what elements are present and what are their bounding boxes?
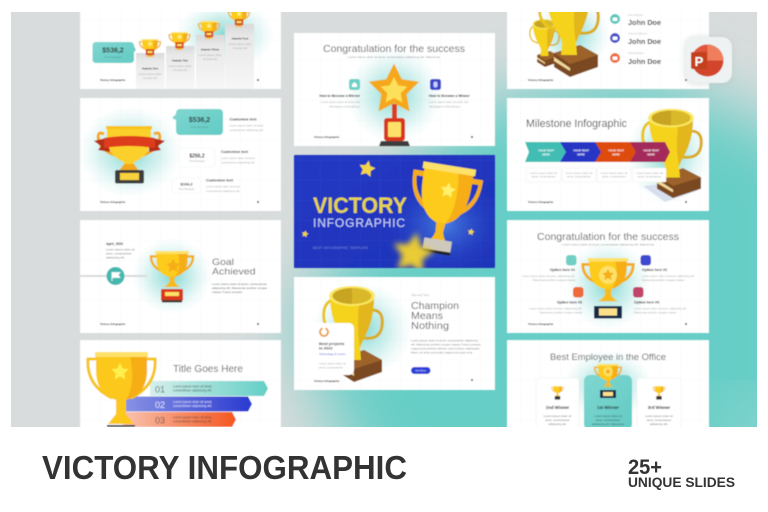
white footer area (0, 427, 768, 512)
left text (319, 94, 361, 108)
banner 01: consectetuer adipiscing elit. (173, 388, 212, 392)
banner 02: consectetuer adipiscing elit. (173, 404, 212, 408)
laurel icon (320, 326, 328, 336)
date note (106, 242, 135, 260)
slide count: 25+ (628, 456, 662, 479)
price bubble (92, 42, 136, 63)
right text (429, 94, 470, 108)
chevron arrows (525, 142, 670, 162)
project card: Best projects (319, 341, 345, 346)
white reward bubble 2: $256,2 (189, 154, 205, 160)
option 3 (529, 300, 582, 314)
subtitle: Lorem ipsum dolor sit amet, consectetuer adipiscing elit. Maecenas (348, 55, 440, 59)
date note: adipiscing elit. (106, 256, 125, 260)
slides artwork (78, 0, 732, 430)
footer: Victory Infographic (528, 322, 554, 326)
option 1: Lorem ipsum dolor sit amet, adipiscing elit. (522, 274, 575, 278)
card: 3rd winner: 3rd Winner (648, 405, 671, 410)
slide: goal achieved (80, 220, 281, 333)
white reward bubble 3: First Rewards (179, 188, 195, 191)
reward text 1: consectetuer adipiscing elit (230, 128, 263, 132)
price bubble: $536,2 (102, 48, 124, 54)
option 1: Option here #1 (550, 268, 575, 272)
banner 03 (123, 412, 236, 427)
teal reward bubble: First Rewards (191, 125, 209, 129)
card: 3rd winner: adipiscing elit. (650, 422, 668, 426)
note cards: amet, consectetuer (532, 174, 555, 178)
slide: rewards with ribbon trophy (78, 98, 281, 211)
note cards: amet, consectetuer (567, 174, 591, 178)
slide: title with numbered banners (80, 340, 281, 430)
option 2 (642, 268, 695, 282)
small trophies on columns (140, 9, 250, 57)
winner three: John Doe (628, 57, 661, 66)
body text: adipiscing elit. Maecenas porttitor congue (212, 286, 268, 290)
white reward bubble 2 (176, 148, 215, 167)
banner 02: Lorem ipsum dolor sit amet, (173, 400, 212, 404)
card: 2nd winner: adipiscing elit. (548, 422, 567, 426)
card: 2nd winner: Lorem ipsum dolor sit (544, 414, 572, 418)
note cards: Lorem ipsum dolor sit (636, 171, 663, 175)
banner 03: consectetuer adipiscing elit. (173, 420, 212, 424)
slide: congratulation options (507, 220, 709, 333)
reward text 3 (206, 178, 240, 193)
reward text 2: Lorem ipsum dolor sit amet (221, 156, 255, 160)
star left (301, 230, 309, 238)
ribbon trophy (94, 126, 165, 184)
chevron arrows: HERE (542, 152, 550, 156)
footer: Victory Infographic (528, 78, 554, 82)
button: Get More (415, 368, 427, 372)
banner 03: 03 (155, 416, 165, 426)
slide count label: UNIQUE SLIDES (628, 475, 735, 490)
heading: Best Employee in the Office (550, 352, 666, 362)
heading: Achieved (212, 266, 256, 278)
option 2: Maecenas porttitor congue massa (642, 278, 685, 282)
chevron arrows: YOUR TEXT (573, 148, 589, 152)
slide: congratulation with star (294, 33, 495, 146)
heading: Congratulation for the success (537, 232, 679, 243)
blurred star (390, 230, 437, 269)
chevron arrows: HERE (647, 152, 655, 156)
heading (411, 300, 459, 332)
star top (359, 160, 376, 178)
white mask above band (0, 0, 768, 12)
award columns: sit amet elit (203, 57, 217, 61)
small tagline: BEST INFOGRAPHIC TEMPLATE (313, 246, 368, 250)
timeline with flag icon (80, 267, 147, 285)
card: 2nd winner: amet, consectetuer (545, 418, 570, 422)
slide: blue cover (294, 155, 503, 275)
award columns: sit amet elit (173, 68, 187, 72)
slide: champion means nothing (294, 277, 495, 390)
reward text 1 (230, 118, 263, 132)
reward text 2 (221, 150, 255, 164)
note cards: amet, consectetuer (602, 174, 626, 178)
winner one (610, 13, 661, 27)
right text: Lorem ipsum dolor sit amet, Est (429, 100, 469, 104)
option 4: Option here #4 (634, 300, 659, 304)
icon: PowerPoint badge (685, 37, 732, 84)
banner 01: 01 (155, 384, 165, 394)
card: 2nd winner (536, 378, 579, 430)
banner 01 (150, 381, 268, 396)
winner one: First Winner (628, 13, 643, 17)
left text: How to Become a Winner (319, 94, 361, 98)
card: 1st winner (584, 364, 632, 430)
slide: best employee (507, 340, 709, 430)
icon: teal square (349, 79, 360, 90)
white reward bubble 2: First Rewards (189, 160, 205, 163)
winner two: Second Winner (628, 32, 647, 36)
award columns: sit amet elit (233, 46, 247, 50)
icon: blue square (430, 79, 441, 90)
option 4 (634, 300, 687, 314)
footer: Victory Infographic (100, 200, 126, 204)
option 3: Lorem ipsum dolor sit amet, adipiscing elit. (529, 306, 582, 310)
note cards: amet, consectetuer (638, 174, 661, 178)
project card: in 2022 (319, 346, 333, 350)
chevron arrows: HERE (612, 152, 620, 156)
heading: Champion (411, 300, 459, 312)
option 1 (522, 268, 575, 282)
winner two: John Doe (628, 37, 661, 46)
date note: April, 2020 (106, 242, 123, 246)
white reward bubble 3: $104,2 (180, 182, 193, 186)
banner 02 (125, 396, 252, 412)
note cards (526, 168, 666, 182)
body text: Lorem ipsum dolor sit amet, consectetuer adipiscing (411, 338, 478, 342)
button (411, 367, 430, 374)
tilted trophy (412, 160, 484, 256)
option 2: Lorem ipsum dolor sit amet, adipiscing elit. (642, 274, 695, 278)
body text: massa. Fusce posuere (212, 290, 243, 294)
award columns: Awards Three (201, 48, 220, 52)
trophy (151, 251, 193, 302)
winner one: John Doe (628, 18, 661, 27)
price bubble: First Rewards (104, 55, 122, 59)
option 3: Option here #3 (557, 300, 582, 304)
right text: aliciniagora orthiroall gos (429, 104, 461, 108)
subtitle: Lorem ipsum dolor sit amet, consectetuer adipiscing elit. Maecenas (562, 242, 654, 246)
large trophy (88, 352, 155, 427)
award columns: Lorem ipsum dolor (168, 64, 192, 68)
reward text 1: Customize text (230, 118, 257, 122)
star right (467, 228, 475, 236)
slide: awards staircase (80, 0, 281, 89)
note cards: Lorem ipsum dolor sit (566, 171, 593, 175)
title: Title Goes Here (173, 363, 243, 375)
heading: Milestone Infographic (526, 118, 627, 130)
isometric trophy (643, 109, 701, 202)
heading: Means (411, 310, 443, 322)
banner 03: Lorem ipsum dolor sit amet, (173, 416, 212, 420)
card: 3rd winner: Lorem ipsum dolor sit (645, 414, 673, 418)
body text: magna sed pulvinar ultricies, purus lectus malesuada (411, 346, 479, 350)
award columns: Lorem ipsum dolor (228, 42, 252, 46)
option 1: Maecenas porttitor congue massa (533, 278, 575, 282)
reward text 2: consectetuer adipiscing elit (221, 160, 255, 164)
award columns: Lorem ipsum dolor (138, 72, 162, 76)
card: 1st winner: amet, consectetuer (596, 418, 620, 422)
heading: Goal (212, 257, 234, 268)
reward text 3: consectetuer adipiscing elit (206, 189, 240, 193)
date note: Lorem ipsum dolor sit (106, 248, 135, 252)
footer: Victory Infographic (314, 379, 340, 383)
footer: Victory Infographic (100, 322, 126, 326)
project card: Technology & Lorem (319, 352, 346, 356)
banner 01: Lorem ipsum dolor sit amet, (173, 384, 212, 388)
footer: Victory Infographic (100, 78, 126, 82)
option 4: Lorem ipsum dolor sit amet, adipiscing elit. (634, 306, 687, 310)
award columns: sit amet elit (143, 76, 157, 80)
card: 1st winner: 1st Winner (597, 405, 619, 410)
body text (411, 338, 482, 354)
card: 2nd winner: 2nd Winner (546, 405, 570, 410)
option 4: Maecenas porttitor congue massa (634, 310, 677, 314)
note cards: Lorem ipsum dolor sit (601, 171, 628, 175)
medal trophy (583, 258, 633, 318)
cover title: VICTORY (313, 193, 407, 218)
option 3: Maecenas porttitor congue massa (540, 310, 582, 314)
card: 1st winner: Lorem ipsum dolor sit (594, 414, 622, 418)
note cards: Lorem ipsum dolor sit (530, 171, 557, 175)
slide: milestone infographic (507, 98, 710, 211)
body text: Lorem ipsum dolor sit amet, consectetuer (212, 282, 267, 286)
reward text 1: Lorem ipsum dolor sit amet (230, 124, 263, 128)
body text (212, 282, 268, 294)
cover subtitle: INFOGRAPHIC (313, 216, 405, 230)
star trophy (369, 64, 419, 146)
teal reward bubble (172, 109, 223, 135)
footer: Victory Infographic (528, 200, 554, 204)
award columns: Awards One (142, 66, 159, 70)
chevron arrows: YOUR TEXT (538, 148, 554, 152)
chevron arrows: HERE (577, 152, 585, 156)
teal reward bubble: $536,2 (189, 117, 210, 124)
left text: Lorem ipsum dolor sit amet, Est (321, 100, 360, 104)
slide: winners list (507, 0, 709, 89)
background band (11, 12, 757, 427)
project card (312, 323, 354, 375)
main title: VICTORY INFOGRAPHIC (42, 449, 407, 486)
icon: PowerPoint badge: P (695, 54, 704, 69)
date note: amet, consectetuer (106, 252, 132, 256)
body text: libero, sit amet commodo magna eros quis urna. (411, 350, 473, 354)
tag: Tips and Trick (411, 293, 429, 297)
chevron arrows: YOUR TEXT (608, 148, 624, 152)
banner 02: 02 (155, 400, 165, 410)
reward text 3: Lorem ipsum dolor sit amet (206, 184, 240, 188)
award columns: Awards Two (172, 58, 188, 62)
heading (212, 257, 256, 278)
award columns (136, 24, 254, 89)
winner three: Third Winner (628, 51, 644, 55)
icons (566, 255, 651, 298)
right text: How to Become a Winner (429, 94, 470, 98)
winner three (610, 51, 661, 66)
body text: elit. Maecenas porttitor congue massa. Fusce posuere, (411, 342, 482, 346)
reward text 2: Customize text (221, 150, 249, 154)
chevron arrows: YOUR TEXT (643, 148, 659, 152)
option 2: Option here #2 (642, 268, 667, 272)
award columns: Lorem ipsum dolor (198, 53, 222, 57)
card: 3rd winner: amet, consectetuer (647, 418, 671, 422)
footer: Victory Infographic (314, 135, 340, 139)
reward text 3: Customize text (206, 178, 234, 182)
card: 3rd winner (637, 378, 681, 430)
isometric trophy (324, 286, 382, 382)
award columns: Awards Four (231, 36, 249, 40)
heading: Congratulation for the success (323, 44, 465, 55)
card: 1st winner: adipiscing elit. Maecenas (592, 422, 625, 426)
heading: Nothing (411, 320, 449, 332)
left text: aliciniagora orthiroall gos (329, 104, 361, 108)
white reward bubble 3 (172, 178, 201, 193)
project card: Lorem ipsum dolor sit (319, 362, 346, 366)
winner two (610, 32, 661, 46)
project card: amet, consectetuer (319, 366, 343, 370)
twin trophies (530, 0, 598, 77)
